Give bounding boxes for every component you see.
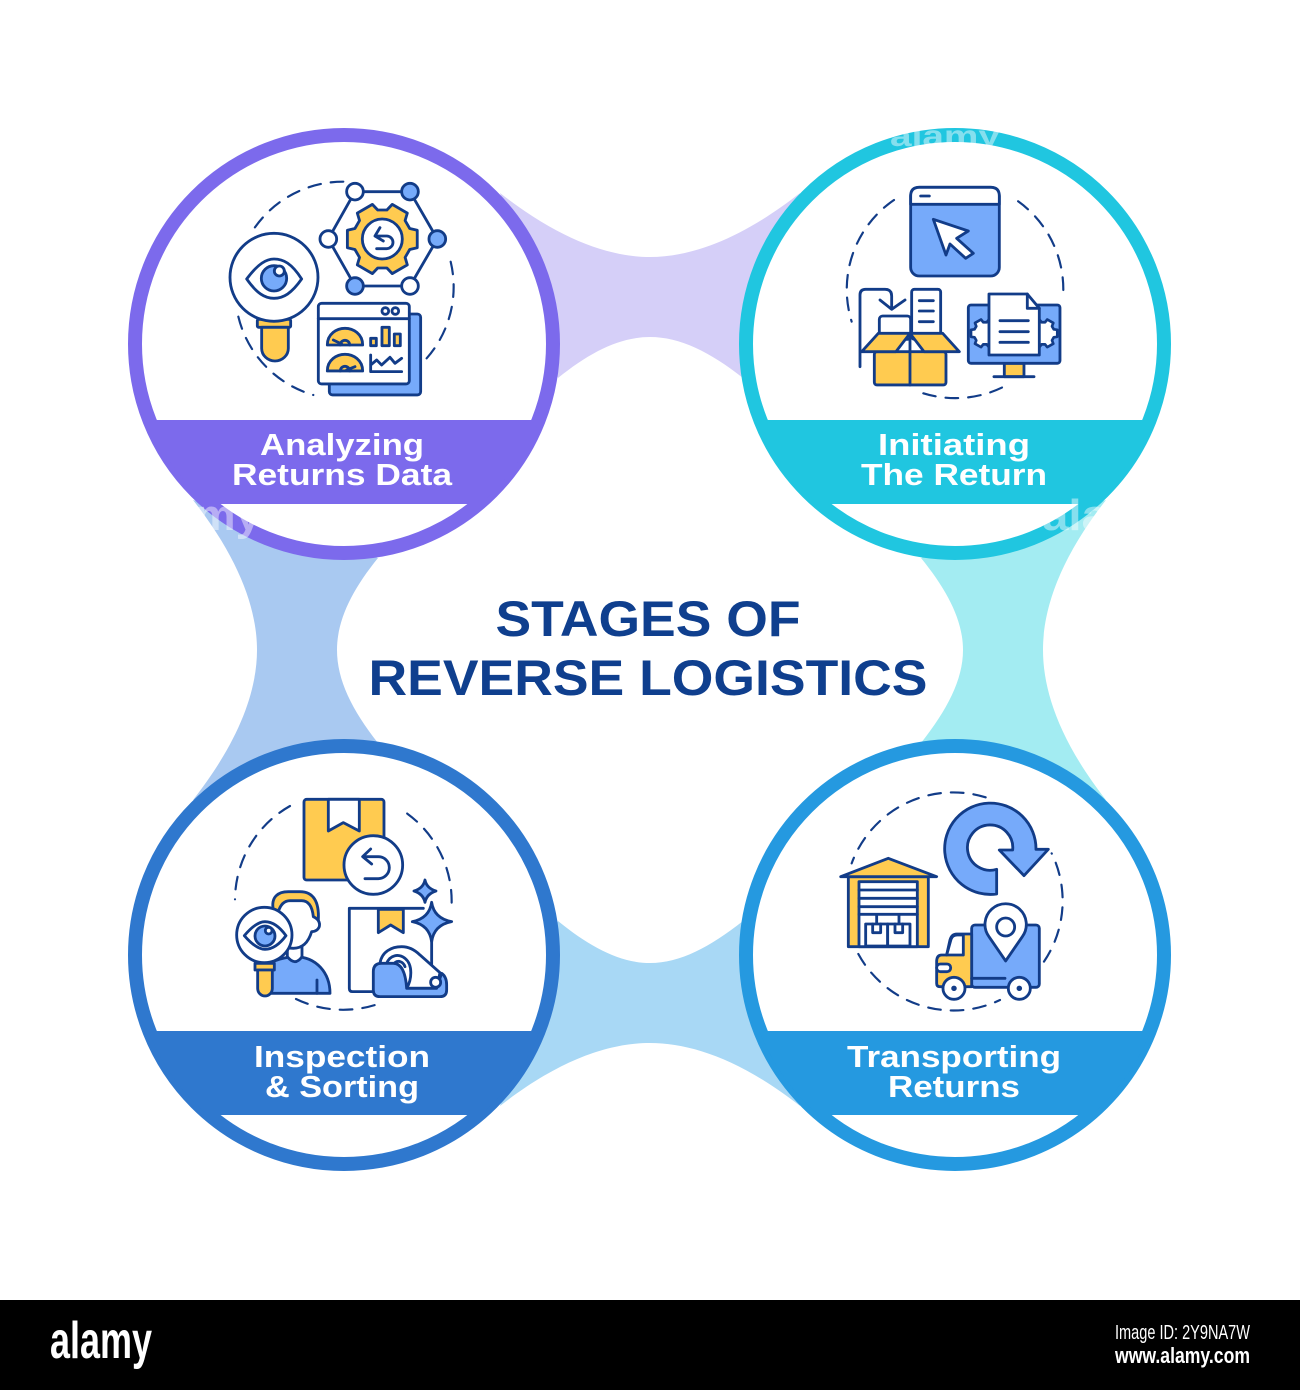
label: Transporting bbox=[847, 1039, 1061, 1074]
panel: transporting returns bbox=[740, 746, 1170, 1164]
watermark fragments bbox=[195, 120, 1109, 540]
connector: right bbox=[921, 500, 1106, 800]
watermark fragments: alamy bbox=[890, 120, 1000, 153]
label: Initiating bbox=[878, 427, 1030, 462]
label band bbox=[156, 420, 531, 504]
label: Returns bbox=[888, 1069, 1020, 1104]
footer image id: Image ID: 2Y9NA7W bbox=[1115, 1322, 1250, 1344]
ring bbox=[135, 135, 553, 553]
label: & Sorting bbox=[265, 1069, 419, 1104]
icon: warehouse, return arrow and delivery truck bbox=[841, 792, 1063, 1010]
label band bbox=[768, 1031, 1142, 1115]
label: Returns Data bbox=[232, 457, 453, 492]
connector: top bbox=[500, 193, 800, 378]
footer website: www.alamy.com bbox=[1114, 1343, 1250, 1368]
label: Inspection bbox=[254, 1039, 430, 1074]
footer logo: alamy bbox=[50, 1312, 152, 1370]
label: Analyzing bbox=[260, 427, 424, 462]
ring bbox=[135, 746, 553, 1164]
icon: returned box, inspector and taped package bbox=[235, 799, 452, 1010]
ring bbox=[746, 135, 1164, 553]
panel: analyzing returns data bbox=[130, 135, 560, 553]
panel: initiating the return bbox=[740, 135, 1170, 553]
watermark fragments: my bbox=[195, 491, 262, 540]
connector: bottom bbox=[500, 921, 800, 1106]
title: REVERSE LOGISTICS bbox=[368, 650, 928, 706]
icon: web window, return box and document monitor bbox=[847, 187, 1063, 398]
label band bbox=[768, 420, 1142, 504]
panel: inspection and sorting bbox=[130, 746, 560, 1164]
connector: left bbox=[193, 500, 378, 800]
watermark fragments: ala bbox=[1042, 491, 1109, 540]
label: The Return bbox=[861, 457, 1047, 492]
ring bbox=[746, 746, 1164, 1164]
title: STAGES OF bbox=[496, 591, 800, 647]
icon: analytics magnifier, gear network and dashboard bbox=[230, 182, 454, 395]
footer bar bbox=[0, 1300, 1300, 1390]
label band bbox=[156, 1031, 532, 1115]
